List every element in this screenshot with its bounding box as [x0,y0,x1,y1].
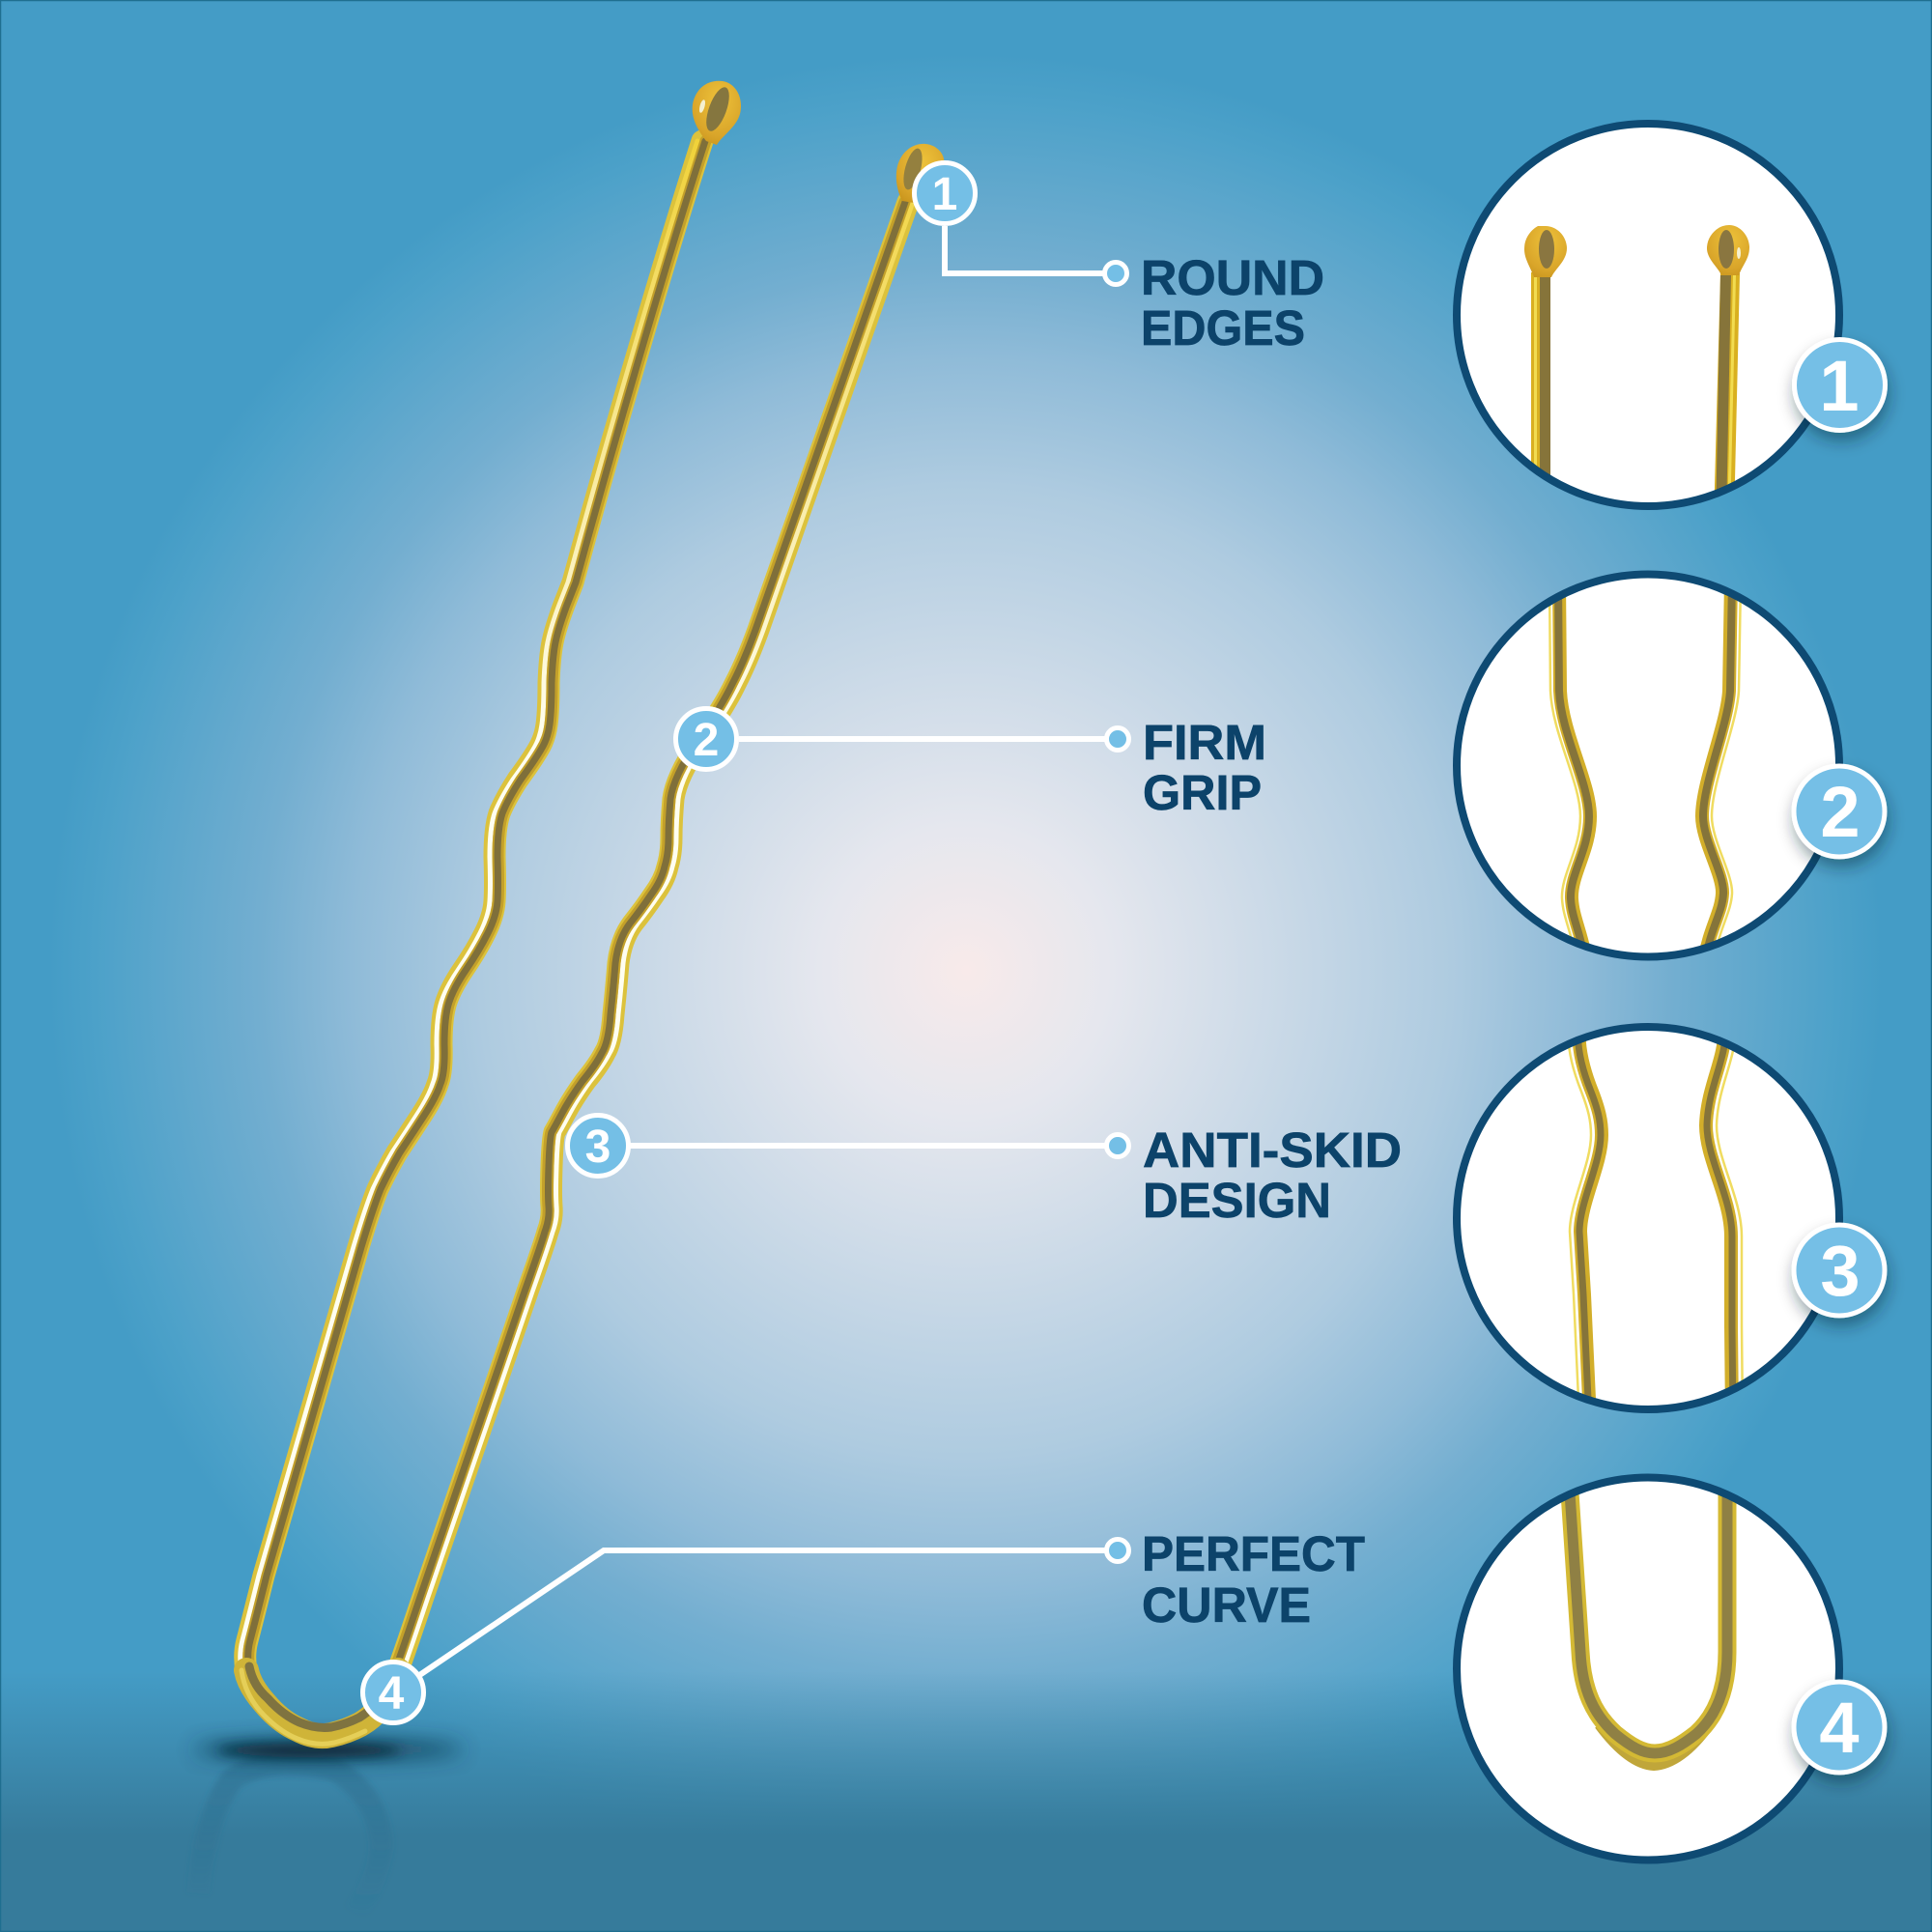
label: perfect curve [1142,1526,1365,1633]
floor shadow [193,1740,464,1759]
connector 3 [628,1143,1106,1149]
connector 2 [739,736,1106,742]
label: round edges: EDGES [1141,300,1305,355]
marker badge 4: 4 [379,1668,405,1719]
label: perfect curve: CURVE [1142,1577,1311,1633]
panel: detail 4 perfect curve [1457,1478,1885,1861]
marker badge 3: 3 [585,1122,611,1173]
badge 3: 3 [1820,1231,1861,1311]
label: anti-skid design: ANTI-SKID [1143,1122,1402,1178]
detail U curve [1569,1478,1727,1765]
marker badge 3 [568,1115,628,1177]
connector dot 4 [1107,1540,1128,1561]
connector dot 1 [1105,263,1126,284]
floor shading [0,1671,1932,1932]
badge 4 [1794,1682,1885,1773]
pin head left [693,81,741,145]
badge 1 [1795,340,1886,431]
label: firm grip: FIRM [1143,715,1266,770]
marker badge 2: 2 [694,715,719,766]
badge 2: 2 [1820,772,1861,852]
panel: detail 1 round edges [1457,124,1886,522]
badge 1: 1 [1819,346,1860,426]
badge 3 [1794,1225,1885,1316]
panel: detail 3 anti-skid design [1457,1027,1885,1420]
connector dot 2 [1107,728,1128,750]
label: round edges [1141,250,1324,355]
detail wavy wire [1549,580,1741,961]
connector 4 [415,1550,1106,1678]
label: perfect curve: PERFECT [1142,1526,1365,1581]
badge 4: 4 [1819,1688,1860,1768]
panel: detail 2 firm grip [1457,574,1885,961]
detail bent wire [1569,1029,1743,1420]
label: firm grip: GRIP [1143,765,1262,820]
label: round edges: ROUND [1141,250,1324,305]
marker badge 1 [914,162,976,224]
pin left leg [241,141,705,1670]
marker badge 2 [676,709,736,769]
marker badge 4 [363,1662,423,1723]
pin right leg [394,202,913,1670]
connector 1 [945,226,1106,273]
label: firm grip [1143,715,1266,820]
connector dot 3 [1107,1134,1128,1157]
pin bottom curve [242,1666,398,1744]
detail pin tips [1524,225,1749,491]
pin head right [896,144,944,203]
marker badge 1: 1 [932,169,957,220]
label: anti-skid design [1143,1122,1402,1228]
main hair pin [241,141,913,1744]
floor reflection of pin [198,1763,382,1913]
label: anti-skid design: DESIGN [1143,1173,1331,1228]
badge 2 [1794,766,1885,857]
